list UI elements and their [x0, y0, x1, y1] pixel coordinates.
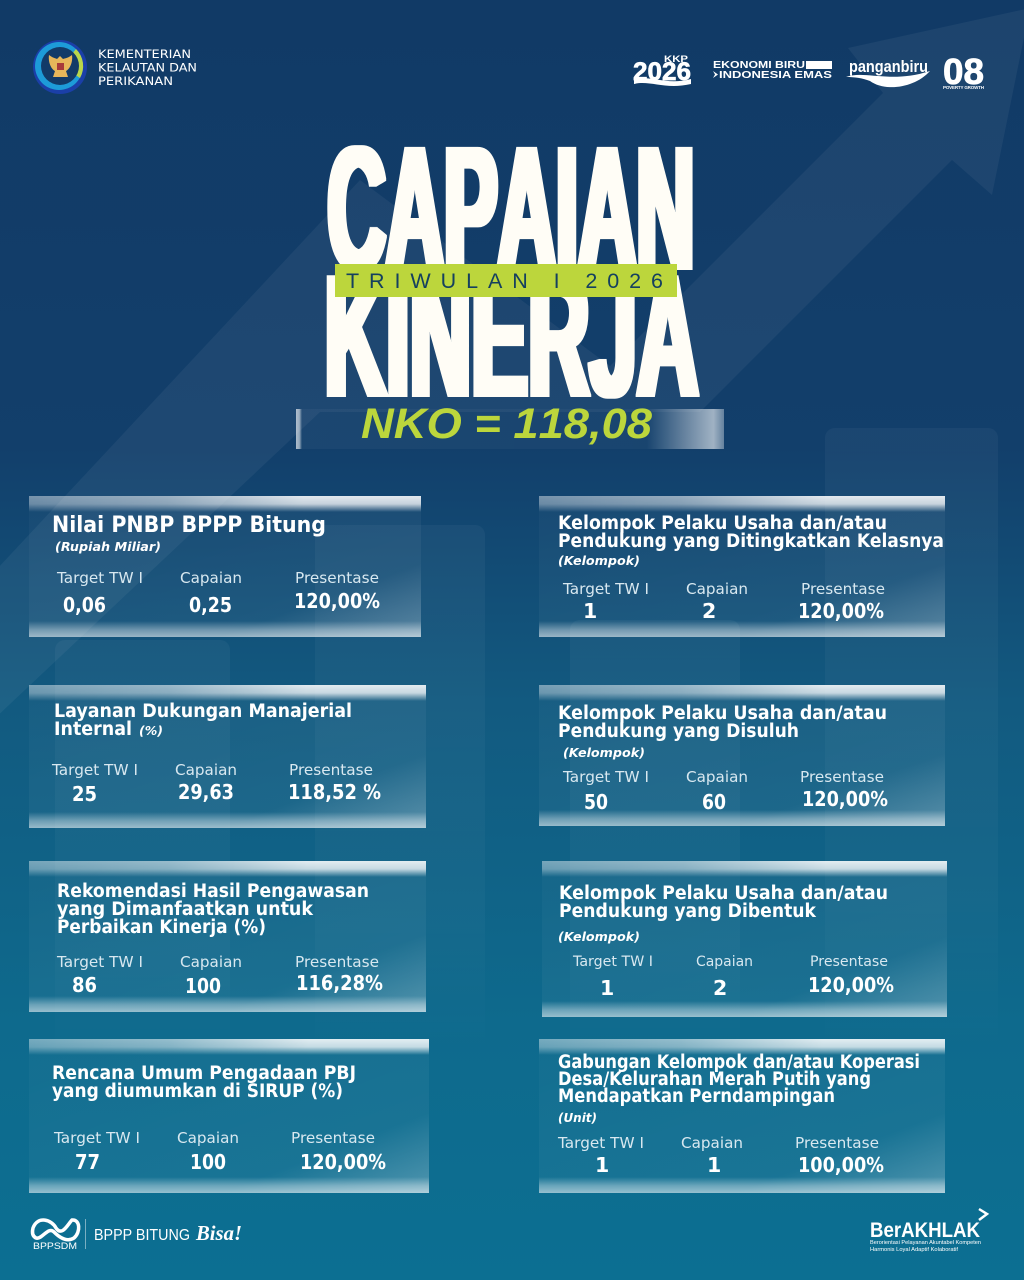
heading: (Kelompok)	[558, 929, 640, 944]
metrics: Target TW I	[572, 954, 653, 970]
metrics: 120,00%	[798, 599, 884, 623]
metrics	[51, 761, 381, 806]
metrics: Capaian	[180, 569, 242, 587]
heading: Rencana Umum Pengadaan PBJ	[52, 1063, 356, 1084]
metrics: Capaian	[686, 768, 748, 786]
metrics: 100	[185, 974, 221, 998]
metrics: Capaian	[180, 953, 242, 971]
logo: Ekonomi Biru Indonesia Emas: EKONOMI BIRU	[713, 59, 805, 71]
icon: BPPSDM infinity wave: BPPSDM	[33, 1241, 77, 1252]
panel: Gabungan Kelompok dan/atau Koperasi	[539, 1039, 945, 1193]
core values	[870, 1240, 981, 1253]
heading	[52, 1063, 356, 1102]
heading: Pendukung yang Dibentuk	[559, 901, 817, 922]
heading: Desa/Kelurahan Merah Putih yang	[558, 1069, 871, 1090]
heading: (Kelompok)	[563, 745, 645, 760]
metrics: Presentase	[810, 954, 888, 970]
metrics: 116,28%	[296, 971, 383, 995]
metrics	[562, 580, 885, 623]
heading: yang Dimanfaatkan untuk	[57, 899, 314, 920]
heading: (Unit)	[558, 1110, 597, 1125]
core values: Berorientasi Pelayanan Akuntabel Kompeten	[870, 1240, 981, 1246]
metrics: 0,25	[189, 593, 232, 617]
heading: Mendapatkan Perndampingan	[558, 1086, 835, 1107]
metrics: Presentase	[795, 1134, 879, 1152]
metrics	[562, 768, 888, 814]
metrics: 50	[584, 790, 608, 814]
ministry name: KELAUTAN DAN	[98, 60, 197, 74]
logo: Ekonomi Biru Indonesia Emas: INDONESIA EMAS	[719, 69, 832, 81]
metrics: 29,63	[178, 780, 234, 804]
metrics: 1	[600, 976, 614, 1000]
metrics	[557, 1134, 884, 1177]
metrics: 60	[702, 790, 726, 814]
heading: Pendukung yang Ditingkatkan Kelasnya	[558, 531, 944, 552]
metrics: Presentase	[295, 569, 379, 587]
metrics: 120,00%	[802, 787, 888, 811]
logo: Ekonomi Biru Indonesia Emas	[713, 59, 832, 81]
footer: BPPSDM logo and tagline	[32, 1219, 242, 1252]
metrics	[53, 1129, 386, 1174]
metrics: Presentase	[291, 1129, 375, 1147]
metrics: Presentase	[801, 580, 885, 598]
heading: Internal	[54, 719, 132, 740]
metrics: Presentase	[800, 768, 884, 786]
panel: Kelompok Disuluh	[539, 685, 945, 826]
metrics: Capaian	[175, 761, 237, 779]
icon: BPPSDM infinity wave	[32, 1220, 79, 1252]
header: ministry logo and name	[33, 40, 197, 94]
metrics: 120,00%	[300, 1150, 386, 1174]
metrics	[56, 953, 383, 998]
title	[324, 111, 698, 433]
metrics: Capaian	[686, 580, 748, 598]
heading: Kelompok Pelaku Usaha dan/atau	[558, 513, 887, 534]
background arrow	[0, 8, 1024, 770]
NKO score: NKO = 118,08	[361, 400, 652, 448]
heading: Layanan Dukungan Manajerial	[54, 701, 352, 722]
tagline	[94, 1221, 242, 1245]
icon: ministry emblem	[33, 40, 87, 94]
panel: Kelompok Dibentuk	[542, 861, 947, 1017]
heading: Pendukung yang Disuluh	[558, 721, 799, 742]
NKO score	[296, 400, 724, 449]
subtitle banner: TRIWULAN I 2026	[346, 269, 663, 293]
heading: Nilai PNBP BPPP Bitung	[52, 513, 326, 538]
heading	[57, 881, 369, 938]
background bars	[55, 428, 998, 1056]
metrics	[572, 954, 894, 1000]
divider	[85, 1219, 86, 1249]
panel: Layanan Dukungan Manajerial Internal	[29, 685, 426, 828]
logo: KKP 2026: KKP	[664, 54, 688, 64]
metrics: Target TW I	[51, 761, 138, 779]
heading: Gabungan Kelompok dan/atau Koperasi	[558, 1052, 920, 1073]
metrics: 120,00%	[294, 589, 380, 613]
heading	[558, 513, 944, 568]
metrics: Target TW I	[562, 580, 649, 598]
heading: yang diumumkan di SIRUP (%)	[52, 1081, 343, 1102]
heading: Rekomendasi Hasil Pengawasan	[57, 881, 369, 902]
panel: Rekomendasi Hasil Pengawasan	[29, 861, 426, 1012]
panel: Nilai PNBP BPPP Bitung	[29, 496, 421, 637]
ministry name: PERIKANAN	[98, 74, 173, 88]
ministry name: KEMENTERIAN	[98, 47, 191, 61]
metrics: Presentase	[295, 953, 379, 971]
core values: Harmonis Loyal Adaptif Kolaboratif	[870, 1247, 958, 1253]
metrics: 25	[72, 782, 97, 806]
logo: 08: 08	[943, 51, 984, 92]
header: partner logos	[633, 51, 984, 92]
footer: BerAKHLAK logo	[870, 1209, 987, 1253]
logo: 08: POVERTY GROWTH	[943, 85, 984, 90]
heading	[558, 883, 888, 944]
metrics: Presentase	[289, 761, 373, 779]
tagline: Bisa!	[195, 1221, 242, 1245]
metrics: 1	[583, 599, 597, 623]
metrics: 86	[72, 973, 97, 997]
metrics: Target TW I	[557, 1134, 644, 1152]
metrics: 100,00%	[798, 1153, 884, 1177]
metrics: 1	[707, 1153, 721, 1177]
unit: (Rupiah Miliar)	[55, 539, 161, 554]
logo: panganbiru	[846, 57, 930, 87]
ministry name	[98, 47, 197, 88]
heading: (%)	[139, 723, 163, 738]
heading	[558, 703, 887, 760]
metrics: 100	[190, 1150, 226, 1174]
heading	[558, 1052, 920, 1125]
metrics: Target TW I	[53, 1129, 140, 1147]
metrics: Capaian	[681, 1134, 743, 1152]
metrics: Capaian	[696, 954, 753, 970]
metrics: Capaian	[177, 1129, 239, 1147]
logo: panganbiru: panganbiru	[849, 57, 928, 76]
metrics: 1	[595, 1153, 609, 1177]
metrics: Target TW I	[56, 569, 143, 587]
heading: (Kelompok)	[558, 553, 640, 568]
metrics: 77	[75, 1150, 100, 1174]
heading: Kelompok Pelaku Usaha dan/atau	[558, 703, 887, 724]
panel: Rencana Umum Pengadaan PBJ	[29, 1039, 429, 1193]
metrics: Target TW I	[56, 953, 143, 971]
metrics: 120,00%	[808, 973, 894, 997]
heading: Perbaikan Kinerja (%)	[57, 917, 266, 938]
heading: Kelompok Pelaku Usaha dan/atau	[559, 883, 888, 904]
logo: KKP 2026: 2026	[633, 58, 691, 86]
metrics	[56, 569, 380, 617]
icon: chevron	[979, 1209, 987, 1220]
metrics: Target TW I	[562, 768, 649, 786]
metrics: 2	[702, 599, 716, 623]
metrics: 0,06	[63, 593, 106, 617]
subtitle banner	[335, 264, 677, 297]
tagline: BPPP BITUNG	[94, 1227, 190, 1244]
heading	[54, 701, 352, 740]
metrics: 118,52 %	[288, 780, 381, 804]
metrics: 2	[713, 976, 727, 1000]
panel: Kelompok Ditingkatkan Kelasnya	[539, 496, 945, 637]
wordmark: BerAKHLAK	[870, 1219, 980, 1242]
